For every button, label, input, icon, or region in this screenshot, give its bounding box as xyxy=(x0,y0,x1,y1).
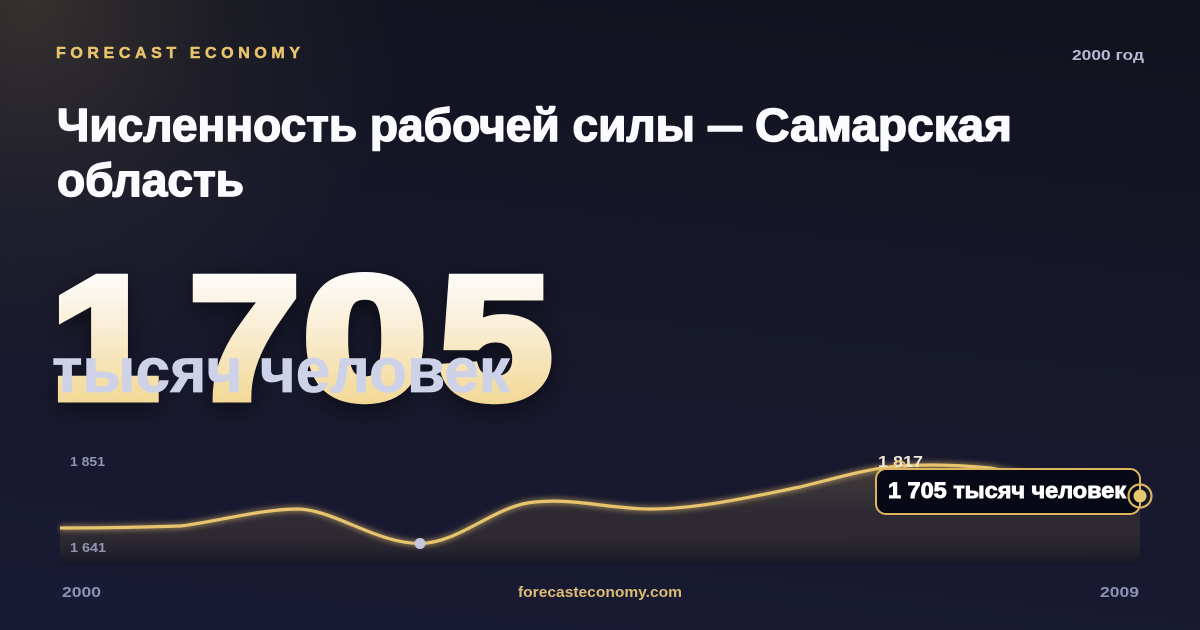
y axis min: 1 641 xyxy=(70,540,106,555)
title: — xyxy=(708,99,742,151)
title: область xyxy=(57,154,244,206)
period label: 2000 год xyxy=(1072,47,1145,64)
value callout: 1 705 тысяч человек xyxy=(888,478,1127,503)
value callout xyxy=(876,469,1140,514)
unit label: тысяч человек xyxy=(52,336,510,406)
chart line glow xyxy=(60,465,1140,544)
source: forecasteconomy.com xyxy=(518,585,682,601)
x axis end: 2009 xyxy=(1100,584,1139,601)
chart line xyxy=(60,465,1140,544)
brand label: FORECAST ECONOMY xyxy=(56,45,300,62)
big number: 0 xyxy=(303,241,427,435)
min point marker xyxy=(414,538,426,549)
title: Численность рабочей силы xyxy=(57,99,695,151)
peak point marker xyxy=(895,461,905,471)
x axis start: 2000 xyxy=(62,584,101,601)
title: Самарская xyxy=(755,99,1012,151)
big number: 1 xyxy=(51,242,159,436)
title xyxy=(57,99,1012,206)
y axis max: 1 851 xyxy=(70,454,105,469)
line chart xyxy=(60,454,1152,565)
big number: 5 xyxy=(439,242,552,436)
big number: 7 xyxy=(189,240,300,435)
chart area fill xyxy=(60,465,1140,565)
current point marker xyxy=(1128,484,1152,508)
peak value label: 1 817 xyxy=(878,454,923,471)
big number xyxy=(51,240,552,436)
